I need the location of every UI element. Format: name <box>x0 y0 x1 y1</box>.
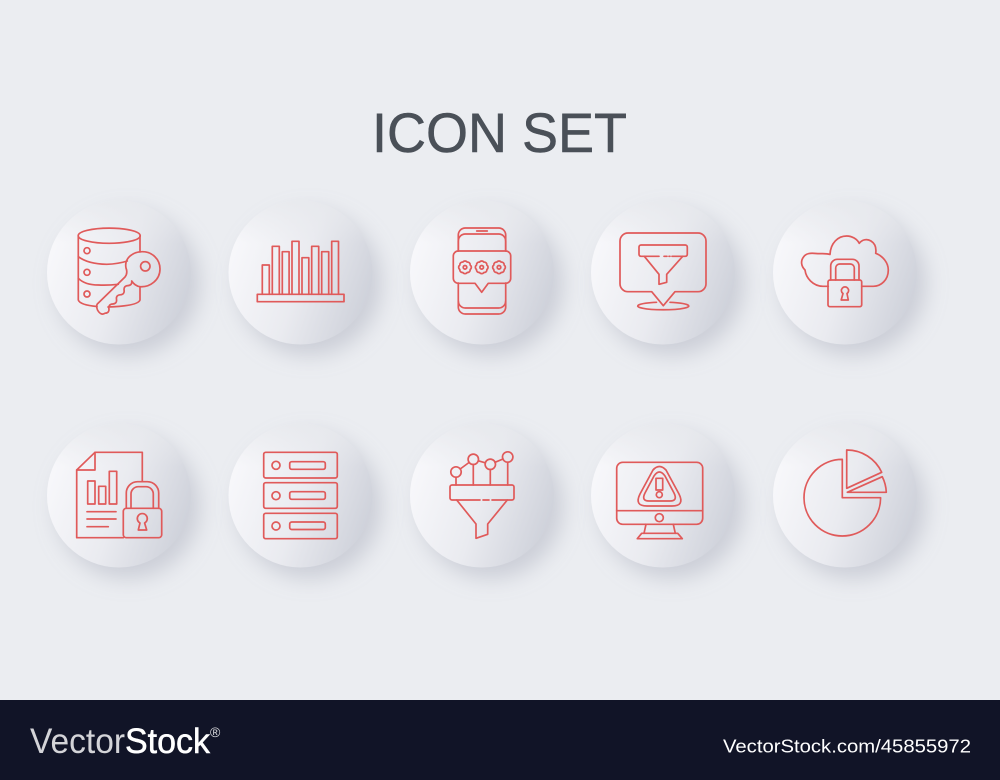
panel: filter location pin <box>591 200 735 344</box>
badge: filter location pin <box>591 200 735 344</box>
panel: cloud lock <box>773 200 917 344</box>
badge: pie chart <box>773 424 917 568</box>
logo wordmark bold part: Stock <box>125 722 210 761</box>
badge: server rack <box>228 424 372 568</box>
badge: phone password <box>410 200 554 344</box>
logo wordmark: Vector <box>30 722 125 761</box>
panel: server rack <box>228 424 372 568</box>
panel: pie chart <box>773 424 917 568</box>
registered mark: ® <box>210 724 221 740</box>
panel: report lock <box>47 424 191 568</box>
panel: bar chart <box>228 200 372 344</box>
badge: database key <box>47 200 191 344</box>
badge: data funnel <box>410 424 554 568</box>
icon: bar chart <box>257 241 344 302</box>
icon: report lock <box>77 452 162 538</box>
panel: monitor warning <box>591 424 735 568</box>
icon: database key <box>78 228 160 314</box>
icon: server rack <box>264 452 337 539</box>
icon: data funnel <box>450 452 514 538</box>
icon: pie chart <box>804 450 886 536</box>
badge: bar chart <box>228 200 372 344</box>
badge: monitor warning <box>591 424 735 568</box>
icon: filter location pin <box>620 233 706 310</box>
icon: monitor warning <box>617 462 703 539</box>
badge: report lock <box>47 424 191 568</box>
panel: phone password <box>410 200 554 344</box>
icon: cloud lock <box>802 236 888 307</box>
panel: data funnel <box>410 424 554 568</box>
icon: phone password <box>453 228 511 314</box>
title: ICON SET <box>372 101 627 164</box>
image id url: VectorStock.com/45855972 <box>723 736 971 756</box>
panel: database key <box>47 200 191 344</box>
badge: cloud lock <box>773 200 917 344</box>
footer bar <box>0 700 1000 780</box>
